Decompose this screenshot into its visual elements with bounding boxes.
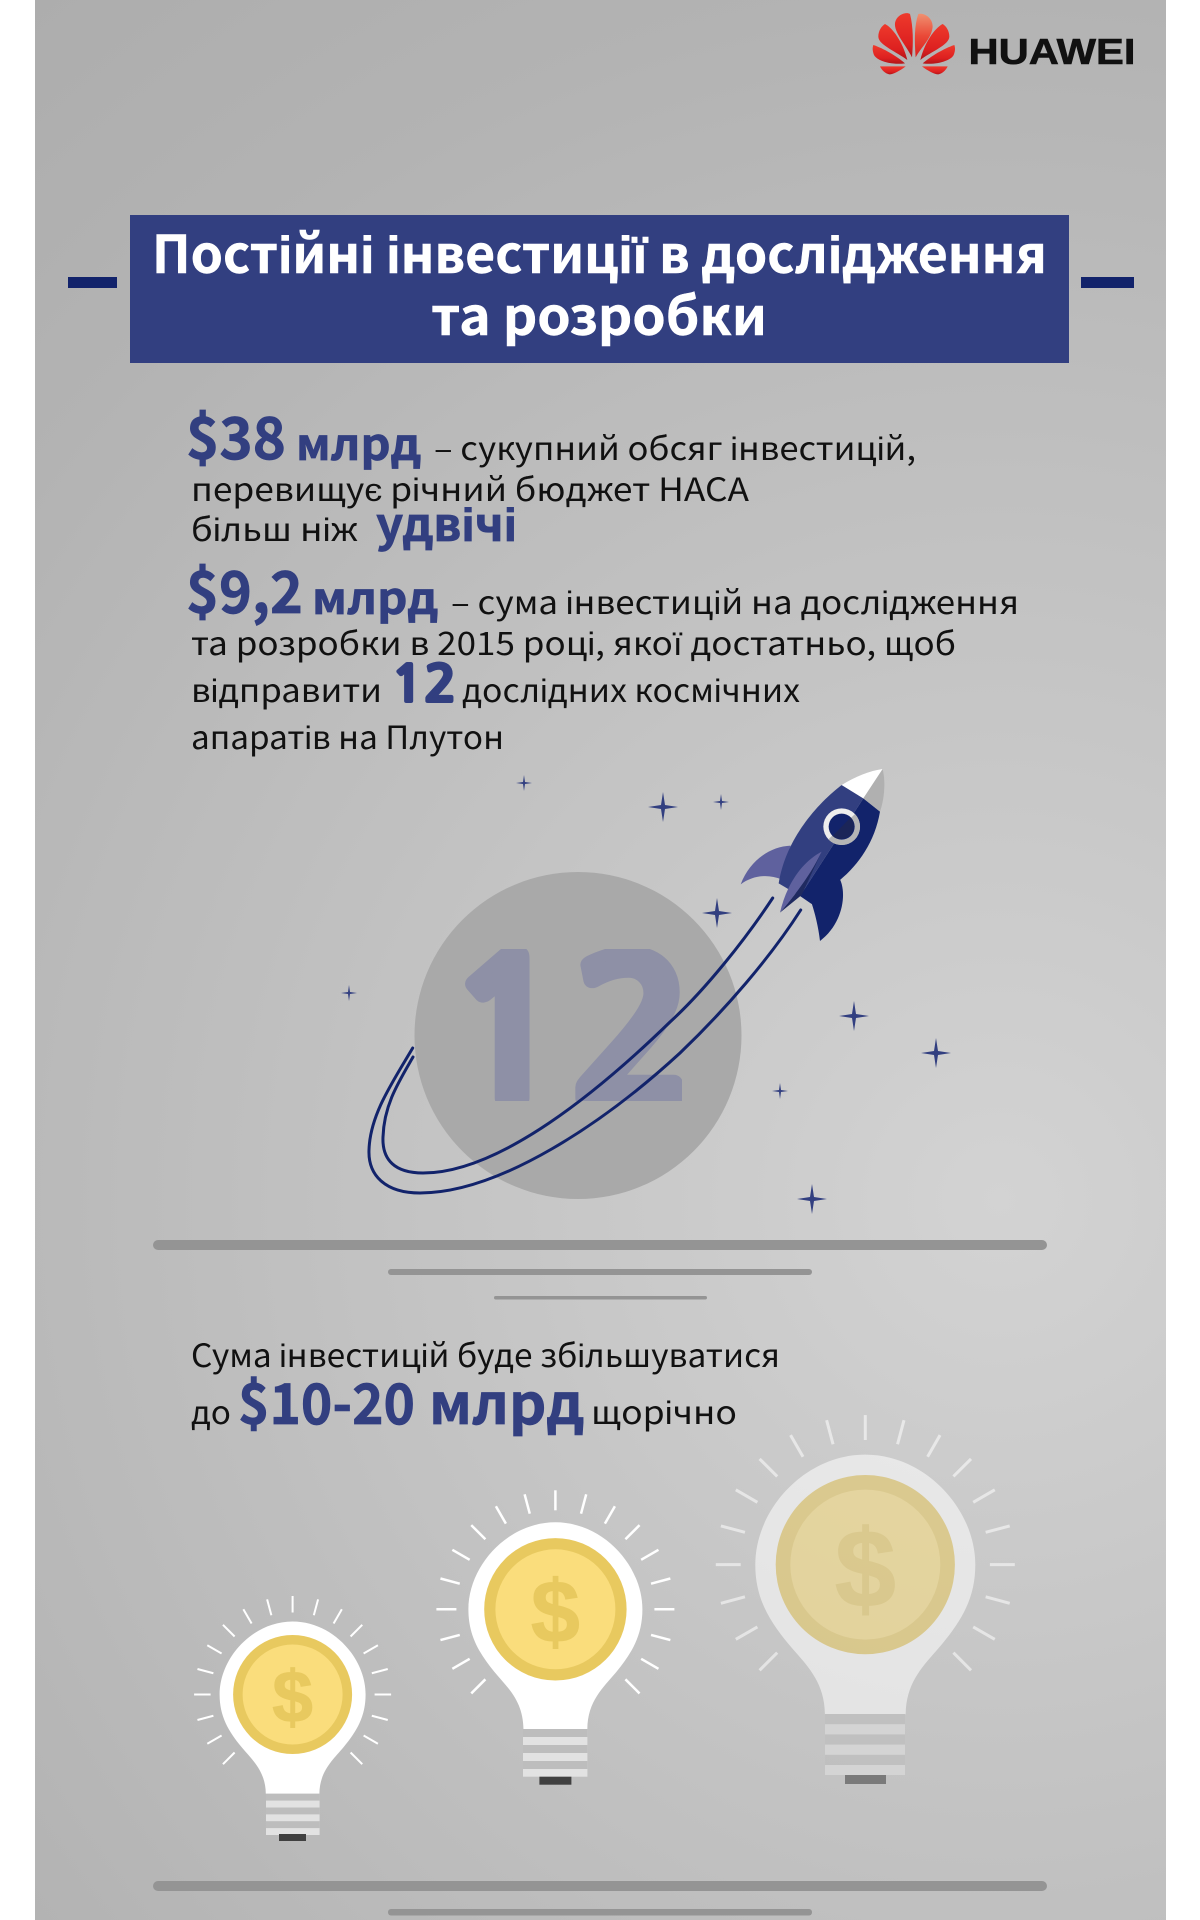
text block: $38 billion: $38 — [186, 392, 286, 476]
title banner — [68, 213, 1134, 363]
icon: small bulb — [194, 1596, 391, 1841]
text block: forecast: Сума інвестицій буде збільшуватися — [191, 1331, 780, 1377]
text block: $9.2 billion: – сума інвестицій на дослідження — [451, 578, 1019, 624]
text block: forecast: млрд — [429, 1360, 584, 1441]
text block: $9.2 billion: дослідних космічних — [462, 666, 800, 712]
text block: $38 billion: більш ніж — [191, 505, 358, 551]
logo wordmark: HUAWEI — [968, 31, 1136, 72]
text block: forecast — [191, 1331, 780, 1441]
text block: $9.2 billion: відправити — [191, 666, 382, 712]
icon: small bulb: $ — [272, 1657, 313, 1738]
right dash — [1081, 277, 1134, 288]
icon: medium bulb: $ — [531, 1562, 580, 1661]
text block: $9.2 billion: та розробки в 2015 році, якої достатньо, щоб — [191, 619, 956, 665]
text block: $38 billion: удвічі — [376, 489, 517, 555]
rocket — [741, 769, 884, 941]
text block: forecast: до — [191, 1388, 231, 1434]
text block: $9.2 billion: млрд — [312, 563, 438, 627]
text block: forecast: $10-20 — [238, 1360, 415, 1441]
title text: Постійні інвестиції в дослідження — [152, 213, 1047, 288]
rocket trails — [369, 898, 801, 1193]
planet — [414, 872, 742, 1199]
text block: forecast: щорічно — [591, 1388, 737, 1434]
text block: $38 billion: млрд — [296, 409, 421, 473]
icon: large faded bulb: $ — [835, 1508, 896, 1631]
text block: $38 billion — [186, 392, 916, 555]
icon: Huawei petals — [873, 13, 955, 74]
text block: $9.2 billion: апаратів на Плутон — [191, 713, 504, 759]
title box — [130, 215, 1069, 363]
illustration: planet, rocket and stars — [341, 769, 951, 1214]
stars — [341, 775, 951, 1214]
text block: $9.2 billion — [186, 546, 1019, 759]
text block: $38 billion: перевищує річний бюджет НАСА — [191, 465, 750, 511]
divider bars: lower — [153, 1881, 1047, 1916]
icon: medium bulb — [436, 1490, 674, 1785]
title text — [152, 213, 1047, 350]
icon: large faded bulb — [716, 1415, 1015, 1784]
planet number: 12 — [445, 937, 695, 1129]
title text: та розробки — [431, 275, 767, 350]
logo: Huawei — [873, 13, 1136, 74]
text block: $9.2 billion: 12 — [391, 660, 457, 710]
left dash — [68, 277, 117, 288]
text block: $9.2 billion: $9,2 — [186, 546, 303, 630]
text block: $38 billion: – сукупний обсяг інвестицій, — [434, 424, 916, 470]
divider bars: upper — [153, 1240, 1047, 1300]
